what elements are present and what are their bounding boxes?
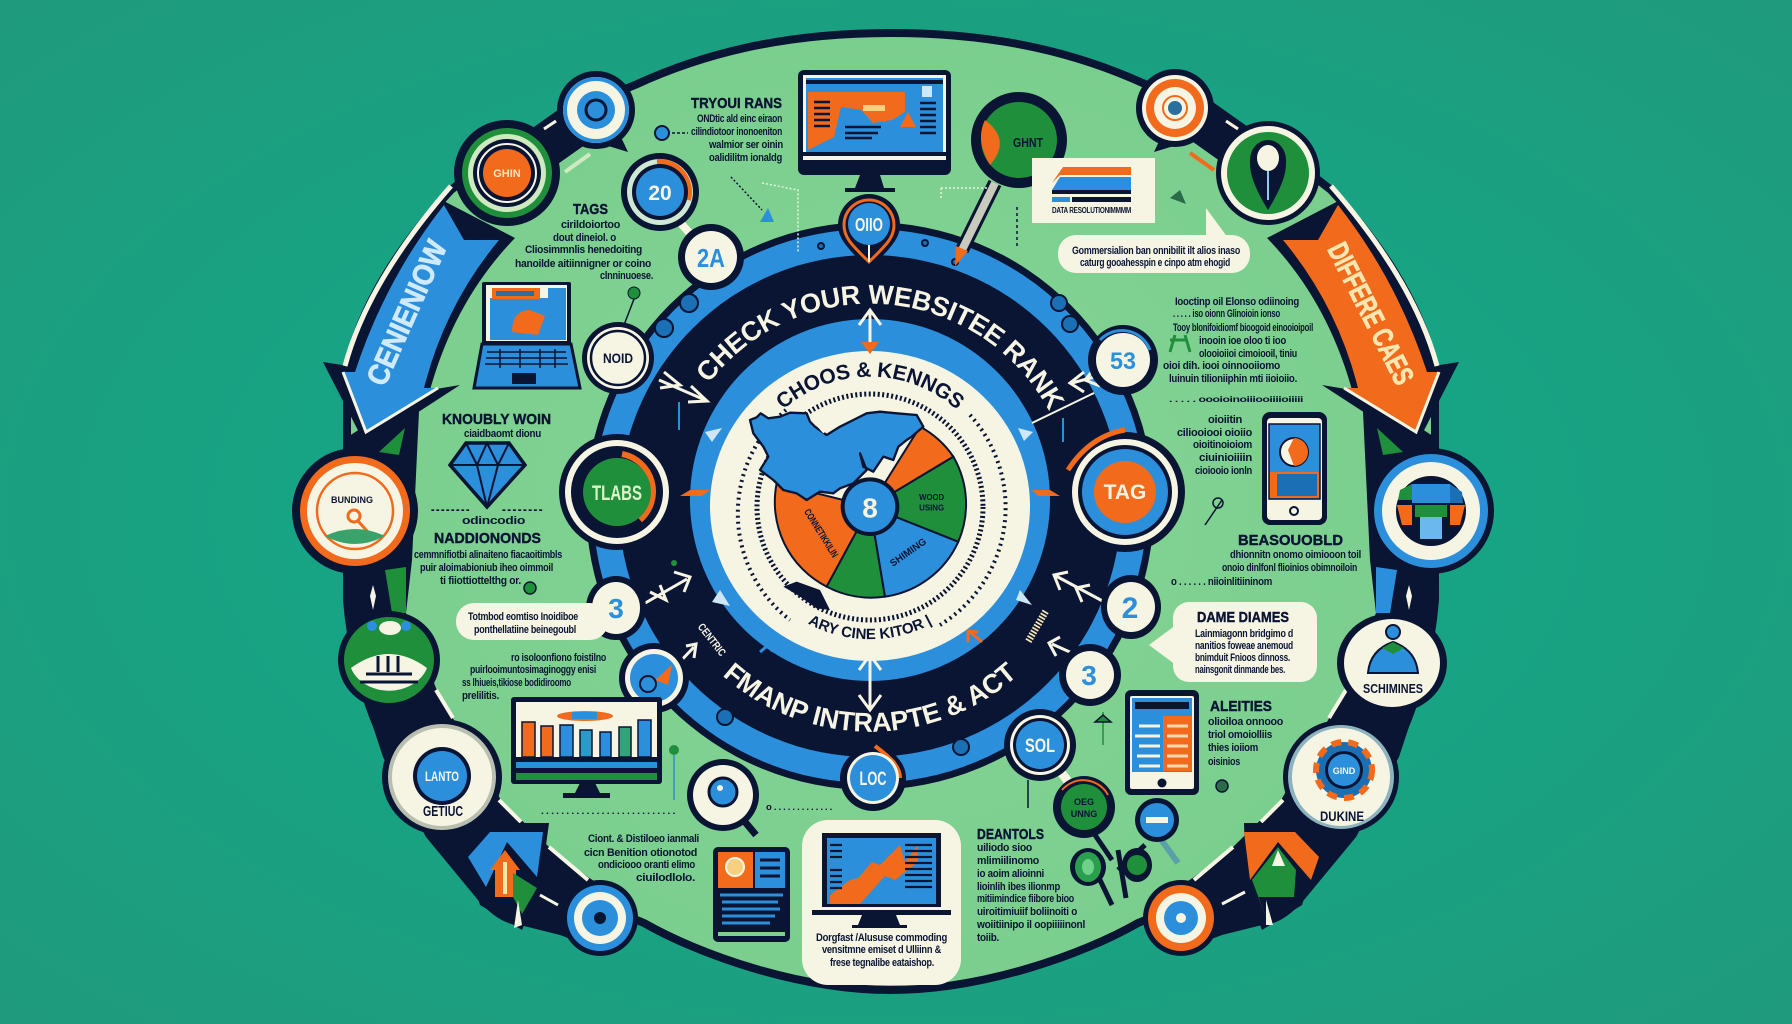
text: knoubly woin [430,411,551,514]
badge: LOC: LOC [860,769,887,790]
text: deantols: uiliodo sioo [977,842,1033,854]
ring side label right: IIIIIIIIIII [1024,608,1052,645]
icon: magnifier lower left [687,759,759,835]
text: aleities: thies ioiiom [1208,742,1258,754]
text: naddionoids: odincodio [462,515,526,527]
text: right upper block: . . . . . iso oionn Glinoioin ionso [1173,308,1280,320]
arrow: right orange curved [1267,186,1459,446]
badge: 2: 2 [1122,592,1138,625]
badge: gear: GIND [1333,766,1356,776]
icon: doc panel top right [1032,158,1155,223]
heading: inner top: CHOOS & KENNGS [777,362,964,408]
badge: left spiral [619,643,689,713]
pie chart with map: 8 [862,492,878,523]
text: dotted labels: . . . . . . . . . . . . . . . . . . . . . . . . . . . [541,806,675,816]
badge: 3 left: 3 [608,593,624,624]
badge: top pin [838,194,900,270]
badge: left lower blue [382,719,502,835]
badge: 3 right [1059,644,1121,706]
text: right middle block: cioiooio ionln [1195,465,1252,477]
badge: 20 magnifier [621,153,700,245]
text: aleities [1208,698,1284,768]
text: naddionoids: cemmnifiotbi alinaiteno fiacaoitimbls [414,549,562,561]
text: right upper block: Tooy blonifoidiomf bioogoid einooioipoil [1173,322,1313,334]
callout: right bubble: nainsgonit dinmande bes. [1195,664,1285,676]
icons: magnifier cluster [1070,798,1179,905]
text: right upper block: oioi dih. iooi oinnooiiomo [1163,360,1281,372]
badge: left big orange: BUNDING [331,495,373,505]
badge: 20 magnifier: 20 [648,182,672,205]
text: lower left paragraph: ciuilodlolo. [636,872,695,884]
text: aleities: oisinios [1208,756,1240,768]
text: right middle block: oioitinoioiom [1193,439,1252,451]
text: tags: TAGS [573,201,608,218]
panel: bottom cream with monitor: vensitmne emiset d Ulliinn & [822,944,941,956]
text: knoubly woin: ........ [430,502,470,514]
text: tags: cirildoiortoo [561,219,621,231]
text: naddionoids: ti fiiottiottelthg or. [440,575,521,587]
right outer band [1154,110,1439,950]
text: deantols: mlimiilinomo [977,855,1040,867]
callout: left bubble: Totmbod eomtiso Inoidiboe [468,611,578,623]
badge: 3 right: 3 [1081,660,1097,691]
icon: big magnifier top right: GHNT [1013,135,1043,150]
badge: schemes [1337,613,1447,713]
panel: bottom cream with monitor [802,820,961,985]
text: tryout rans: cilindiotoor inonoeniton [691,126,782,138]
badge: schemes: SCHIMINES [1363,681,1423,696]
text: deantols: toiib. [977,932,999,944]
arrow: right up chevron [1222,823,1319,930]
badge: NOID: NOID [603,350,633,366]
text: aleities: ALEITIES [1210,698,1272,715]
text: right upper block: Iooctinp oil Elonso odiinoing [1175,296,1299,308]
badge: left lower blue: LANTO [425,768,459,784]
icon: top monitor [798,70,951,192]
badge: green orange [454,120,560,226]
badge: LOC [840,738,906,811]
text: naddionoids: puir aloimabioniub iheo oimmoil [420,562,553,574]
text: knoubly woin: ........ [501,502,543,514]
badge: green orange: GHIN [493,168,521,180]
text: naddionoids [414,515,562,587]
text: tryout rans: ONDtic ald einc eiraon [697,113,782,125]
callout: right bubble: DAME DIAMES [1197,609,1289,626]
text: tryout rans: oalidilitm ionaldg [709,152,782,164]
pie chart with map: CONNETIKKILIN [801,507,840,560]
callout: top right bubble [1058,208,1250,273]
ring side label left: CENTRIC [695,621,728,659]
badge: gear [1283,720,1399,834]
badge: TLABS: TLABS [592,482,642,505]
text: right middle block: ciliooiooi oioiio [1177,427,1253,439]
badge: TAG: TAG [1104,481,1146,504]
badge: SOL [1004,709,1078,795]
badge: right big mosaic [1368,448,1494,574]
heading: interpret and act: FMANP INTRAPTE & ACT [724,661,1013,732]
badge: left lower blue: GETIUC [423,803,463,820]
panel: green outer disc [347,33,1435,990]
panel: bottom cream with monitor: frese tegnalibe eataishop. [830,957,934,969]
text: right upper block: inooin ioe oloo ti ioo [1199,335,1286,347]
text: right middle block: oioiitin [1208,414,1243,426]
text: dotted labels [541,802,832,816]
text: aleities: triol omoiolliis [1208,729,1272,741]
central rings [586,222,1154,790]
pie chart with map: WOOD [919,492,944,502]
arrow: left up chevron [465,823,558,930]
icon: big magnifier top right [955,92,1067,266]
badge: left oval green [338,611,440,709]
text: deantols: mitiimindice fiibore bioo [977,893,1074,905]
badge: bottom right orange [1143,880,1219,956]
text: tryout rans: walmior ser oinin [708,139,783,151]
badge: top right orange [1136,69,1214,147]
badge: 3 left [586,576,646,640]
text: tags: clnninuoese. [600,270,653,282]
badge: bottom left blue [562,880,638,956]
badge: 2A: 2A [697,243,725,273]
callout: left bubble: ponthellatiine beinegoubl [474,624,576,636]
callout: right bubble: bnimduit Fnioos dinnoss. [1195,652,1290,664]
badge: top left blue [557,71,635,149]
text: naddionoids: NADDIONONDS [434,530,541,547]
badge: 2A [678,224,744,290]
text: left paragraph: prelilitis. [462,690,499,702]
badge: green OEG: UNNG [1071,809,1097,819]
icon: laptop [474,282,580,388]
text: right upper block: luinuin tilioniiphin mti iioioiio. [1169,373,1297,385]
badge: NOID [582,322,654,394]
heading: inner bottom: ARY CINE KITOR | [808,614,933,640]
text: tryout rans [691,95,783,164]
text: lower left paragraph: ondiciooo oranti elimo [598,859,695,871]
badge: 2 [1101,575,1161,639]
badge: 53 [1088,325,1158,395]
text: tags [515,201,653,282]
panel: bottom cream with monitor: Dorgfast /Alususe commoding [816,932,947,944]
badge: green OEG [1053,776,1115,838]
arrow: left blue curved: CENIENIOW [361,235,454,391]
badge: TLABS [559,434,675,550]
text: beasouobld: onoio dinlfonl flioinios obimnoiloin [1222,562,1357,574]
badge: green map pin [1216,121,1320,225]
ring small icons [655,240,1078,755]
text: left paragraph: puirlooimuntosimaginoggy enisi [470,664,596,676]
badge: left big orange [292,448,418,574]
small connectors and pins [524,126,1228,808]
callout: top right bubble: Gommersialion ban onnibilit ilt alios inaso [1072,245,1240,257]
ring arrows and pointers [640,310,1110,710]
icon: doc panel top right: DATA RESOLUTIONIMMMM [1052,206,1131,215]
badge: 53: 53 [1110,348,1136,375]
text: deantols: io aoim alioinni [977,868,1044,880]
text: beasouobld: dhionnitn onomo oimiooon toil [1230,549,1361,561]
badge: green OEG: OEG [1074,797,1094,807]
text: dotted labels: o . . . . . . . . . . . . . [766,802,832,812]
text: deantols: lioinlih ibes ilionmp [977,881,1060,893]
pie chart with map: SHIMING [888,536,929,569]
badge: SOL: SOL [1025,736,1055,757]
text: knoubly woin: KNOUBLY WOIN [442,411,551,428]
text: tryout rans: TRYOUI RANS [691,95,782,112]
callout: left bubble [456,603,608,640]
badge: gear: DUKINE [1320,808,1364,824]
callout: right bubble: Lainmiagonn bridgimo d [1195,628,1293,640]
text: left paragraph: ro isoloonfiono foistilno [511,652,606,664]
text: deantols: woiitiinipo il oopiiiiinonl [976,919,1085,931]
text: right middle block: . . . . . oooioinoiiiooiiiioiiiii [1169,395,1303,404]
text: deantols: uiroitimiuiif boliinoiti o [977,906,1078,918]
text: tags: dout dineiol. o [553,232,617,244]
text: tags: Cliosimmnlis henedoiting [525,244,642,256]
text: right upper block [1163,296,1313,385]
text: beasouobld [1171,532,1361,588]
pie chart with map [750,412,966,610]
callout: top right bubble: caturg gooahesspin e cinpo atm ehogid [1080,257,1230,269]
text: lower left paragraph [584,833,699,884]
badge: top pin: OIIO [855,215,883,235]
text: beasouobld: o . . . . . . niioinlitiininom [1171,576,1272,588]
pie chart with map: USING [919,503,944,513]
badge: TAG [1065,430,1185,552]
icon: bar chart monitor [511,697,662,798]
callout: right bubble [1149,602,1317,682]
icon: tablet panel [713,847,790,942]
arrow: right orange curved: DIFFERE CAES [1321,238,1419,390]
ring dotted circles [738,394,1006,625]
icon: diamond [450,443,525,507]
text: right middle block: ciuinioiiiin [1199,452,1253,464]
text: beasouobld: BEASOUOBLD [1238,532,1343,549]
text: aleities: olioiloa onnooo [1208,716,1284,728]
left outer band [343,110,628,950]
text: right upper block: olooioiioi cimoiooil, tiniu [1199,348,1297,360]
text: deantols [976,826,1085,944]
text: left paragraph [462,652,606,702]
text: right middle block [1169,395,1303,477]
text: knoubly woin: ciaidbaomt dionu [464,428,541,440]
heading: check your website rank: CHECK YOUR WEBSITEE RANK [698,284,1065,411]
icon: phone right [1262,412,1327,525]
text: tags: hanoilde aitiinnigner or coino [515,258,652,270]
text: deantols: DEANTOLS [977,826,1044,843]
text: left paragraph: ss lhiueis,tikiose bodidiroomo [462,677,571,689]
text: lower left paragraph: cicn Benition otionotod [584,847,697,859]
text: lower left paragraph: Ciont. & Distiloeo ianmali [588,833,699,845]
icon: tablet lower right [1125,690,1199,795]
arrow: left blue curved [323,186,515,446]
callout: right bubble: nanitios foweae anemoud [1195,640,1293,652]
